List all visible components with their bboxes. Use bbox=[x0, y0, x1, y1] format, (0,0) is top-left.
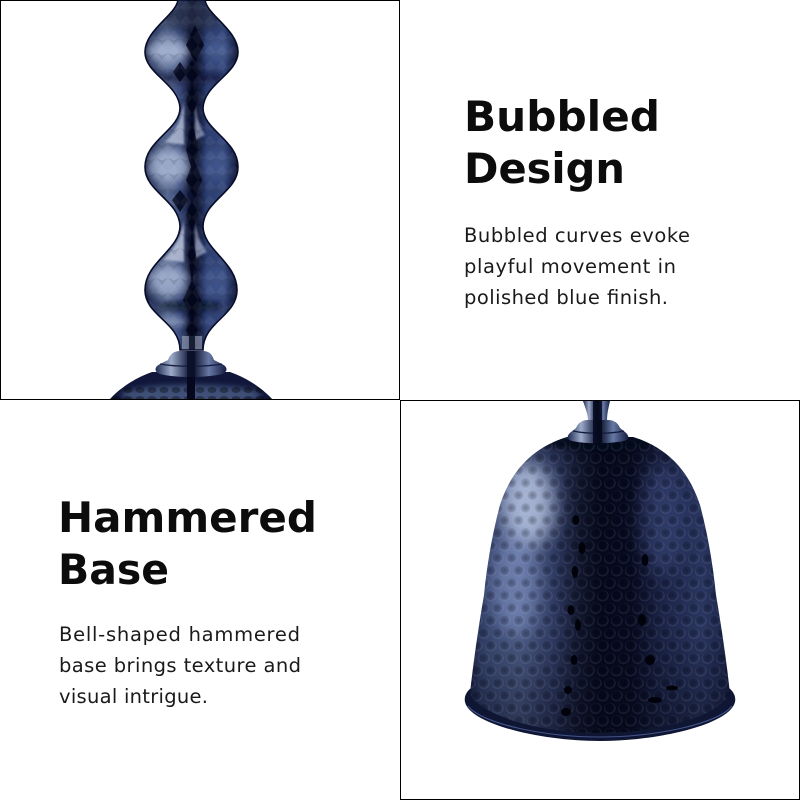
heading: Hammered Base: Base bbox=[58, 545, 169, 594]
text block: hammered description bbox=[59, 623, 301, 708]
dark reflection blotches bbox=[561, 515, 678, 716]
icon: hammered bell-shaped lamp base bbox=[460, 401, 740, 741]
icon: small dome and collars bbox=[110, 351, 272, 399]
panel: hammered base photo bbox=[400, 400, 800, 800]
text block: bubbled description: Bubbled curves evoke bbox=[464, 224, 690, 247]
text block: bubbled description bbox=[464, 224, 690, 309]
stem and collars bbox=[583, 401, 610, 421]
icon: bubbled blue lamp stem bbox=[140, 0, 244, 352]
heading: Hammered Base: Hammered bbox=[58, 493, 317, 542]
heading: Bubbled Design bbox=[464, 92, 660, 193]
heading: Hammered Base bbox=[58, 493, 317, 594]
central dark diamonds bbox=[172, 25, 204, 350]
text block: hammered description: Bell-shaped hammered bbox=[59, 623, 300, 646]
text block: hammered description: visual intrigue. bbox=[59, 685, 208, 708]
panel: bubbled design text bbox=[464, 92, 690, 309]
panel: hammered base text bbox=[58, 493, 317, 708]
text block: bubbled description: polished blue finish. bbox=[464, 286, 668, 309]
text block: hammered description: base brings texture and bbox=[59, 654, 301, 677]
text block: bubbled description: playful movement in bbox=[464, 255, 676, 278]
heading: Bubbled Design: Design bbox=[464, 144, 625, 193]
rim of base bbox=[465, 688, 735, 741]
heading: Bubbled Design: Bubbled bbox=[464, 92, 660, 141]
panel: bubbled stem photo bbox=[0, 0, 400, 405]
